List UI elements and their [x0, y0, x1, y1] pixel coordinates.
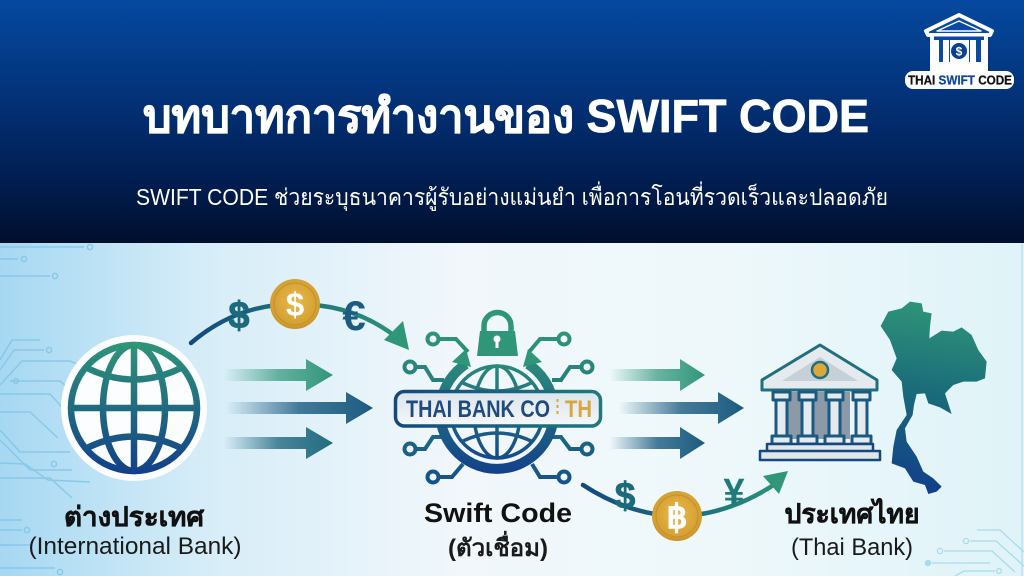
arrow bottom — [610, 427, 705, 459]
arrow bottom — [224, 427, 333, 459]
icon: bank building — [760, 345, 880, 460]
arrow middle — [226, 392, 373, 424]
roof — [762, 345, 877, 390]
logo building: $ — [956, 44, 963, 58]
connector nodes — [404, 334, 592, 482]
label: thailand — [784, 498, 920, 561]
circuit pattern left — [0, 244, 100, 575]
currency arc bottom — [583, 471, 788, 541]
logo wordmark: THAI SWIFT CODE — [908, 74, 1012, 88]
subtitle: SWIFT CODE ช่วยระบุธนาคารผู้รับอย่างแม่นยำ เพื่อการโอนที่รวดเร็วและปลอดภัย — [136, 181, 888, 211]
euro symbol: € — [342, 292, 366, 339]
map of Thailand — [881, 302, 987, 494]
yen symbol: ¥ — [723, 472, 745, 514]
circuit pattern right — [925, 243, 1024, 576]
code bar: TH — [565, 396, 592, 423]
code separator — [556, 399, 558, 417]
coin baht — [652, 491, 702, 541]
dollar symbol: $ — [228, 295, 250, 337]
label: swift code: (ตัวเชื่อม) — [448, 530, 548, 562]
base — [760, 444, 880, 460]
label: swift code — [424, 498, 572, 562]
coin dollar: $ — [286, 286, 304, 323]
label: international: (International Bank) — [28, 533, 242, 560]
icon: international globe — [61, 335, 207, 481]
columns — [772, 392, 871, 444]
label: international: ต่างประเทศ — [64, 502, 205, 532]
dollar symbol: $ — [615, 475, 636, 516]
label: international — [28, 502, 242, 560]
diagram background — [0, 243, 1024, 576]
code bar — [396, 392, 600, 426]
arrows: globe to swift code — [224, 359, 373, 459]
swift code hub icon — [396, 312, 600, 482]
label: swift code: Swift Code — [424, 498, 572, 528]
logo: Thai Swift Code — [905, 15, 1014, 89]
label: thailand: (Thai Bank) — [791, 534, 913, 561]
coin dollar — [270, 279, 320, 329]
currency arc top — [191, 279, 409, 350]
label: thailand: ประเทศไทย — [784, 498, 920, 529]
hub ring and globe — [440, 349, 554, 469]
code bar: THAI BANK CO — [406, 396, 550, 423]
coin baht: ฿ — [666, 498, 688, 535]
padlock — [477, 312, 518, 356]
arrows: swift code to thai bank — [610, 359, 744, 459]
arrow top — [224, 359, 333, 391]
arrow top — [610, 359, 705, 391]
title: บทบาทการทำงานของ SWIFT CODE — [143, 90, 869, 142]
header banner — [0, 0, 1024, 243]
arrow middle — [619, 392, 744, 424]
